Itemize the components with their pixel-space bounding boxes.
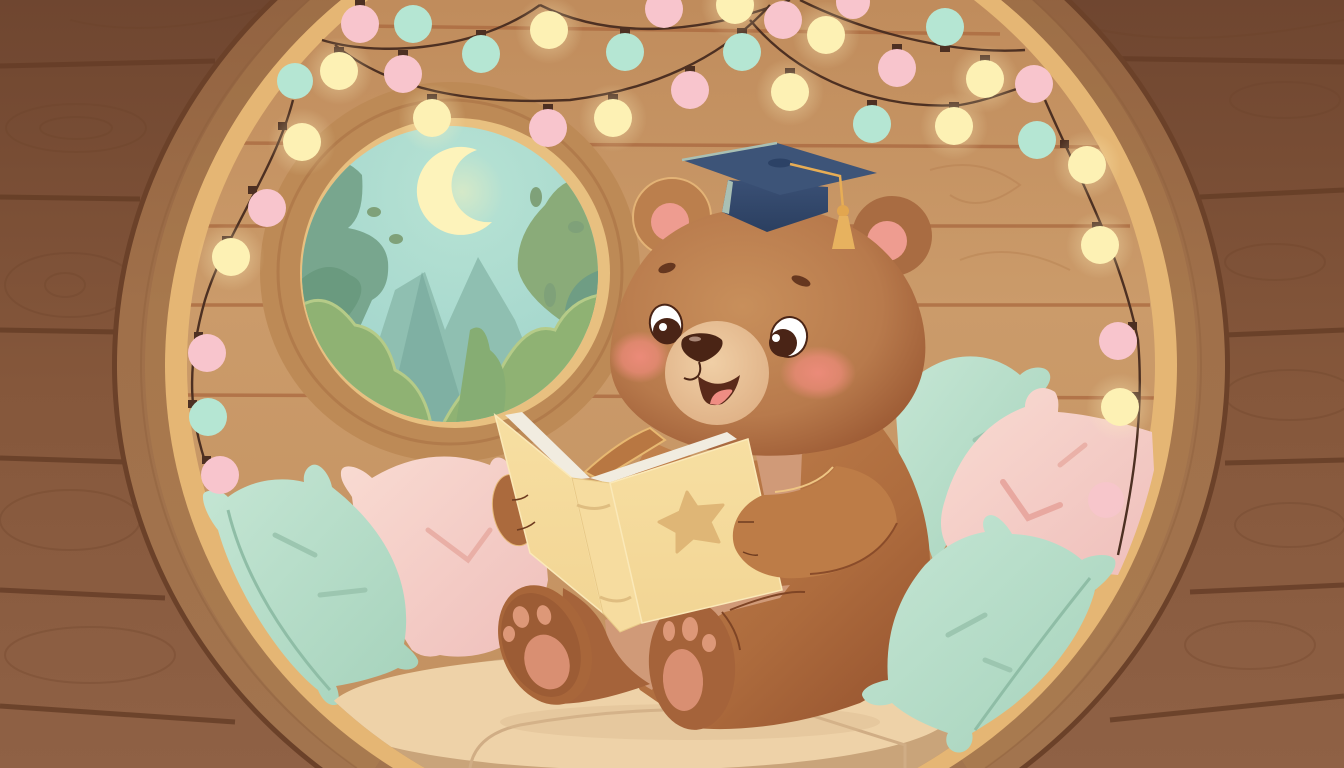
seat cushion bbox=[334, 659, 949, 768]
light wires bbox=[192, 0, 1140, 555]
right brow bbox=[790, 273, 812, 289]
window wood surround bbox=[260, 82, 640, 462]
bear belly bbox=[605, 450, 802, 690]
pillow: right pink bbox=[941, 388, 1154, 575]
cheeks bbox=[610, 331, 670, 383]
right eye bbox=[767, 314, 811, 360]
left brow bbox=[657, 261, 677, 275]
muzzle bbox=[665, 321, 769, 425]
right tree bbox=[518, 178, 600, 330]
bear arm behind book bbox=[585, 428, 665, 480]
pillow: left pink bbox=[341, 456, 548, 657]
head bbox=[610, 207, 925, 456]
left dark trees bbox=[302, 165, 388, 360]
light glows bbox=[197, 0, 1154, 441]
cap button bbox=[768, 158, 792, 168]
light sockets bbox=[188, 0, 1139, 464]
left paw fingers over book bbox=[512, 495, 535, 530]
foreground bushes bbox=[304, 298, 432, 421]
star emblem bbox=[659, 492, 723, 552]
left leg and foot bbox=[481, 571, 650, 719]
pillow: left mint bbox=[203, 465, 418, 705]
mountains bbox=[362, 257, 543, 422]
bear body bbox=[610, 425, 930, 729]
moon bbox=[417, 147, 492, 235]
right page edges bbox=[590, 432, 737, 483]
pillow: back right mint bbox=[895, 356, 1050, 565]
left cover bbox=[495, 415, 603, 613]
pillow: front right mint bbox=[862, 515, 1115, 753]
cap base bbox=[722, 180, 828, 232]
right cover bbox=[610, 439, 782, 623]
mint bulbs bbox=[189, 5, 1056, 436]
left page edges bbox=[505, 412, 590, 480]
window cream frame bbox=[300, 118, 610, 428]
left ear bbox=[633, 178, 711, 256]
left paw bbox=[487, 471, 543, 549]
cap board bbox=[682, 143, 877, 195]
tassel bbox=[790, 164, 855, 249]
nose bbox=[681, 333, 723, 362]
yellow bulbs bbox=[212, 0, 1139, 426]
graduation cap bbox=[682, 143, 877, 249]
right ear bbox=[852, 196, 932, 276]
left eye bbox=[646, 302, 686, 346]
window with night landscape bbox=[260, 82, 640, 462]
inner wall with wood planks bbox=[180, 0, 1170, 768]
right foot bbox=[645, 592, 805, 733]
mouth bbox=[684, 362, 740, 405]
pink bulbs bbox=[188, 0, 1137, 518]
open book bbox=[495, 412, 782, 632]
bear bbox=[481, 178, 932, 733]
window scene bbox=[295, 120, 600, 430]
spine bbox=[572, 478, 642, 632]
string lights bbox=[188, 0, 1154, 555]
bear right arm bbox=[733, 466, 897, 578]
